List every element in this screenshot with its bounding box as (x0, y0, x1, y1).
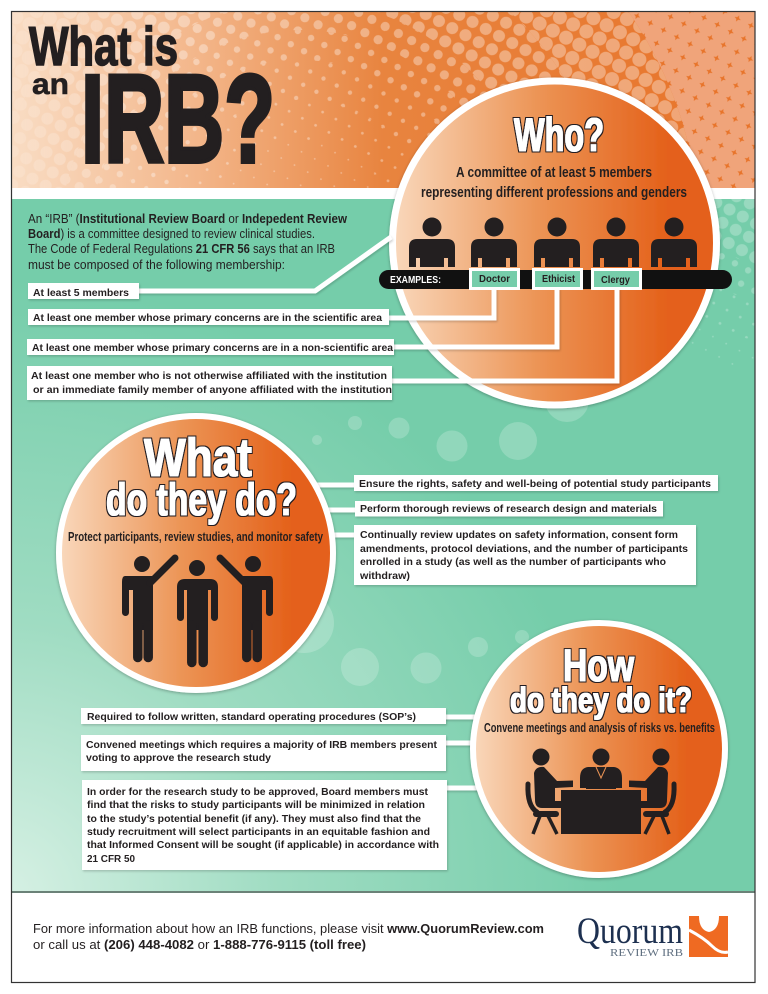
process box: approval (82, 780, 447, 870)
title (29, 15, 275, 189)
footer contact text: or call us at (206) 448-4082 or 1-888-776-9115 (toll free) (33, 937, 366, 952)
label: clergy (592, 270, 640, 288)
duty box: updates: enrolled in a study (as well as the number of participants who (360, 556, 666, 568)
duty box: updates (354, 525, 696, 585)
logo: Quorum Review IRB: REVIEW IRB (610, 947, 683, 959)
intro paragraph: must be composed of the following membership: (28, 258, 285, 272)
membership box: non-scientific: At least one member whose primary concerns are in a non-scientific area (32, 342, 393, 354)
label: clergy: Clergy (601, 274, 630, 286)
intro paragraph: Board) is a committee designed to review clinical studies. (28, 227, 315, 241)
process box: convened meetings: Convened meetings which requires a majority of IRB members present (86, 739, 437, 751)
process box: SOPs (81, 708, 446, 724)
process box: convened meetings (81, 735, 446, 771)
title: What is (29, 15, 178, 77)
heading: what do they do (106, 428, 297, 525)
header banner with halftone (12, 12, 754, 188)
connector lines: what circle to boxes (316, 485, 357, 535)
panel: how circle (473, 623, 725, 875)
heading: how do they do it: How (563, 640, 635, 691)
panel: what circle (59, 416, 333, 690)
connector lines: membership to who circle (136, 237, 617, 381)
process box: approval: to the study’s potential benefit (if any). They must also find that the (87, 813, 421, 825)
what description: Protect participants, review studies, and monitor safety (68, 530, 323, 544)
title: IRB? (81, 50, 275, 189)
icon: five committee members (409, 218, 697, 267)
footer divider (12, 891, 755, 893)
membership box: unaffiliated: or an immediate family member of anyone affiliated with the institution (33, 384, 392, 396)
heading: how do they do it (510, 640, 692, 720)
duty box: updates: amendments, protocol deviations, and the number of participants (360, 543, 688, 555)
membership box: at least 5: At least 5 members (33, 287, 129, 299)
duty box: updates: withdraw) (359, 570, 410, 582)
membership box: unaffiliated: At least one member who is not otherwise affiliated with the institution (31, 370, 387, 382)
process box: approval: find that the risks to study participants will be minimized in relation (87, 799, 425, 811)
intro paragraph: The Code of Federal Regulations 21 CFR 56 says that an IRB (28, 242, 335, 256)
who description: representing different professions and genders (421, 184, 687, 201)
examples bar: EXAMPLES: (390, 275, 441, 286)
label: doctor (470, 270, 518, 288)
connector lines: boxes to how circle (444, 717, 480, 788)
label: doctor: Doctor (479, 273, 510, 285)
membership box: at least 5 (28, 283, 139, 299)
green body background (12, 199, 754, 891)
logo: Quorum Review IRB: Quorum (577, 911, 683, 952)
heading: how do they do it: do they do it? (510, 681, 692, 720)
heading: who: Who? (514, 108, 604, 161)
duty box: updates: Continually review updates on safety information, consent form (360, 529, 678, 541)
who description: A committee of at least 5 members (456, 164, 652, 181)
title: an (32, 68, 69, 101)
label: ethicist (534, 270, 582, 288)
footer contact text: For more information about how an IRB functions, please visit www.QuorumReview.com (33, 921, 544, 936)
icon: three people raising arms (122, 556, 273, 662)
process box: approval: 21 CFR 50 (87, 853, 135, 865)
process box: SOPs: Required to follow written, standard operating procedures (SOP’s) (87, 711, 416, 723)
process box: convened meetings: voting to approve the research study (86, 752, 271, 764)
footer contact text (33, 921, 544, 952)
process box: approval: study recruitment will select participants in an equitable fashion and (87, 826, 430, 838)
logo: Quorum Review IRB (577, 911, 728, 959)
intro paragraph (28, 212, 347, 272)
heading: what do they do: What (144, 428, 252, 488)
membership box: scientific: At least one member whose primary concerns are in the scientific area (33, 312, 382, 324)
label: ethicist: Ethicist (542, 273, 575, 285)
duty box: rights: Ensure the rights, safety and well-being of potential study participants (359, 478, 711, 490)
membership box: unaffiliated (27, 366, 392, 400)
heading: what do they do: do they do? (106, 474, 297, 525)
intro paragraph: An “IRB” (Institutional Review Board or Indepedent Review (28, 212, 347, 226)
process box: approval: In order for the research study to be approved, Board members must (87, 786, 428, 798)
panel: who circle (392, 81, 716, 405)
who description (421, 164, 687, 201)
duty box: reviews: Perform thorough reviews of research design and materials (360, 503, 657, 515)
process box: approval: that Informed Consent will be sought (if applicable) in accordance with (87, 839, 439, 851)
examples bar (379, 270, 732, 289)
icon: meeting around table (528, 748, 674, 834)
